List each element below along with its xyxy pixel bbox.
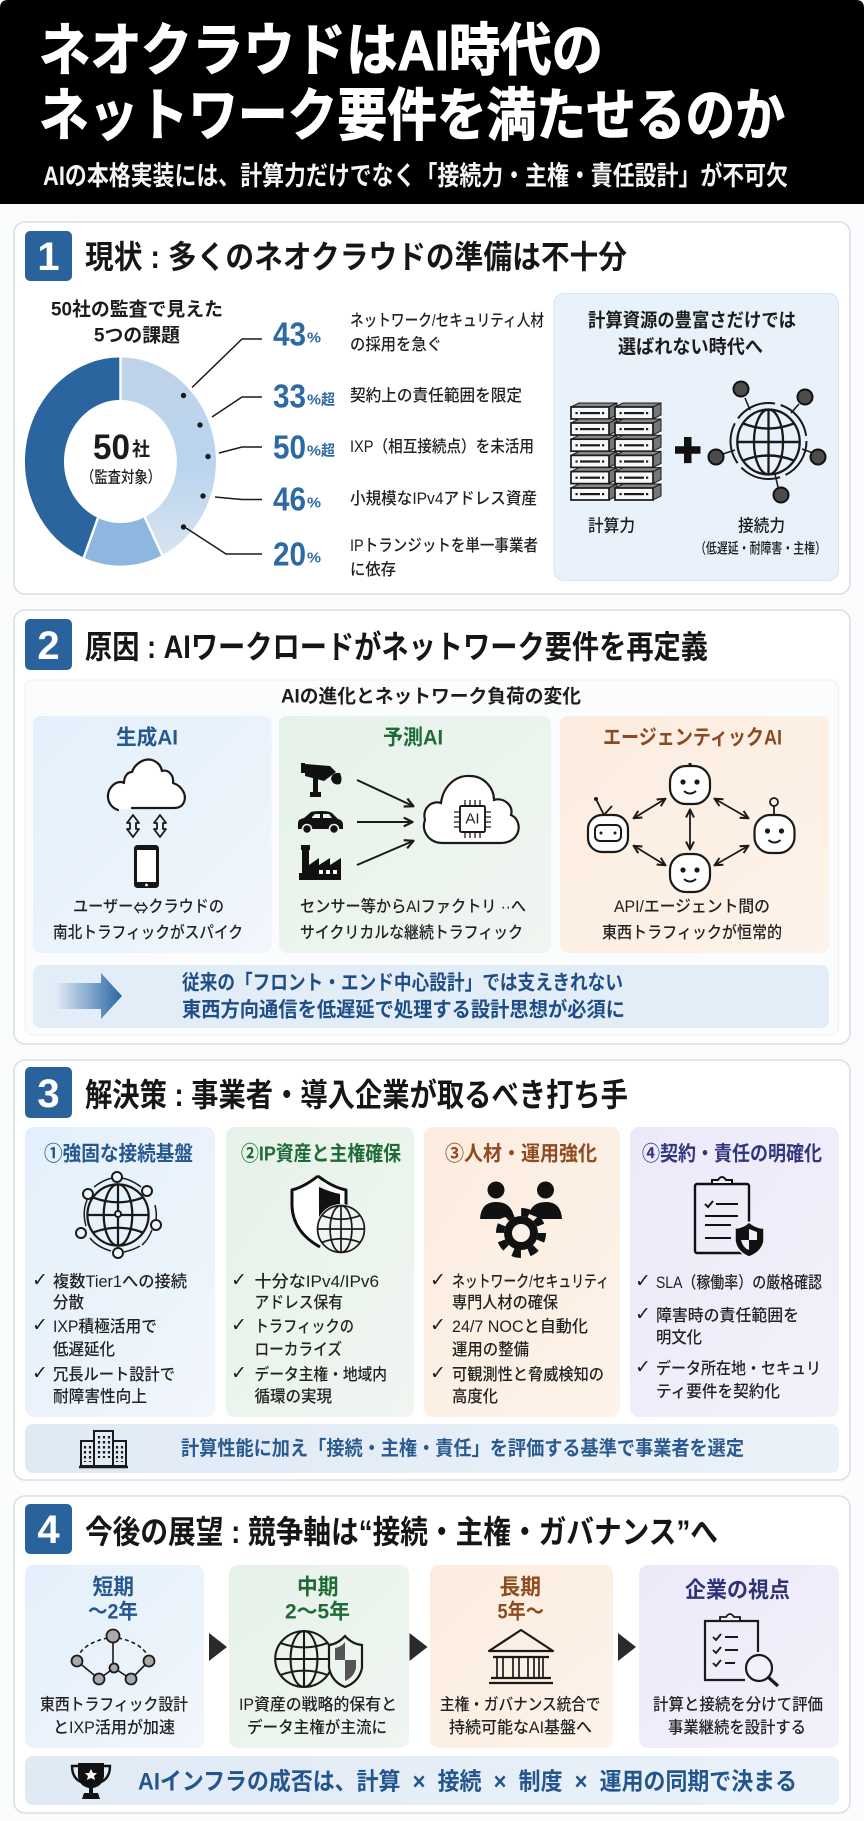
card text bbox=[239, 1695, 397, 1737]
card text: API/エージェント間の bbox=[614, 898, 770, 916]
bullet list: ✓ bbox=[231, 1362, 247, 1384]
section 2 badge bbox=[25, 619, 72, 670]
section 4 badge: 4 bbox=[37, 1508, 60, 1552]
bullet list: ✓ bbox=[32, 1362, 48, 1384]
bullet list: ✓ bbox=[32, 1269, 48, 1291]
icon: server racks bbox=[571, 403, 661, 500]
donut chart bbox=[25, 357, 216, 566]
stat 20%: IPトランジットを単一事業者 bbox=[350, 536, 538, 555]
compute label: 計算力 bbox=[588, 516, 635, 536]
stat 20%: に依存 bbox=[350, 560, 396, 579]
card text: 持続可能なAI基盤へ bbox=[449, 1718, 592, 1737]
banner: design conclusion bbox=[33, 965, 829, 1028]
card: talent and operations bbox=[424, 1127, 620, 1417]
card text bbox=[653, 1695, 823, 1737]
section 3 heading: 解決策 : 事業者・導入企業が取るべき打ち手 bbox=[85, 1077, 628, 1113]
bullet list: アドレス保有 bbox=[254, 1293, 343, 1312]
header band bbox=[0, 0, 864, 204]
card: generative AI bbox=[33, 716, 272, 953]
bullet list: 運用の整備 bbox=[452, 1340, 529, 1359]
donut heading: 50社の監査で見えた bbox=[51, 298, 223, 320]
donut heading: 5つの課題 bbox=[94, 326, 180, 346]
bullet list: IXP積極活用で bbox=[53, 1317, 157, 1336]
icon: left robot bbox=[588, 797, 628, 852]
icon: phone bbox=[134, 845, 159, 888]
section 3 badge: 3 bbox=[37, 1072, 60, 1116]
bullet list: 低遅延化 bbox=[53, 1340, 115, 1359]
card: talent and operations: ③人材・運用強化 bbox=[445, 1142, 597, 1166]
card text: IP資産の戦略的保有と bbox=[239, 1695, 397, 1714]
bullet list: 複数Tier1への接続 bbox=[53, 1272, 187, 1291]
card: long term: 長期 bbox=[500, 1574, 541, 1600]
card: connectivity foundation bbox=[25, 1127, 215, 1417]
icon: AI cloud: AI bbox=[465, 810, 480, 828]
icon: clipboard with shield bbox=[695, 1177, 764, 1257]
icon: trophy bbox=[72, 1763, 110, 1799]
arrows to cloud bbox=[357, 780, 413, 865]
donut center label bbox=[81, 428, 161, 486]
bullet list: ✓ bbox=[430, 1269, 446, 1291]
icon: plus bbox=[675, 437, 700, 463]
bullet list: 冗長ルート設計で bbox=[53, 1365, 175, 1384]
bullet list: 循環の実現 bbox=[254, 1387, 332, 1406]
icon: shield with globe bbox=[292, 1176, 366, 1254]
inner heading: AIの進化とネットワーク負荷の変化 bbox=[281, 684, 581, 708]
icon: camera bbox=[301, 763, 342, 797]
icon: globe with nodes bbox=[76, 1172, 161, 1258]
bullet list bbox=[32, 1269, 187, 1406]
bullet list bbox=[430, 1269, 609, 1406]
bullet list: ✓ bbox=[231, 1314, 247, 1336]
icon: bottom robot bbox=[670, 853, 710, 892]
bullet list: 可観測性と脅威検知の bbox=[452, 1365, 604, 1384]
icon: car bbox=[298, 811, 343, 834]
section 1 badge: 1 bbox=[37, 235, 60, 279]
bullet list: ✓ bbox=[635, 1270, 651, 1292]
bullet list: データ所在地・セキュリ bbox=[656, 1358, 821, 1378]
card: IP assets and sovereignty: ②IP資産と主権確保 bbox=[241, 1142, 401, 1166]
card text: サイクリカルな継続トラフィック bbox=[300, 923, 523, 942]
card: mid term: 中期 bbox=[297, 1574, 338, 1600]
stat 46%: % bbox=[307, 494, 321, 512]
icon: network nodes bbox=[72, 1630, 154, 1684]
card: contracts and responsibility: ④契約・責任の明確化 bbox=[642, 1142, 822, 1166]
connectivity label bbox=[695, 516, 826, 558]
card: contracts and responsibility bbox=[630, 1127, 839, 1417]
bullet list: ✓ bbox=[430, 1362, 446, 1384]
bullet list: 専門人材の確保 bbox=[452, 1293, 558, 1312]
stat 20%: % bbox=[307, 550, 321, 566]
banner text: 計算性能に加え「接続・主権・責任」を評価する基準で事業者を選定 bbox=[181, 1437, 744, 1460]
bullet list: 明文化 bbox=[656, 1328, 702, 1347]
stat 43%: 43 bbox=[273, 316, 306, 352]
icon: factory bbox=[299, 845, 341, 880]
card: enterprise view: 企業の視点 bbox=[685, 1578, 790, 1602]
icon: people and gear bbox=[480, 1182, 562, 1254]
title line 1: ネオクラウドはAI時代の bbox=[39, 19, 603, 83]
banner text: 東西方向通信を低遅延で処理する設計思想が必須に bbox=[182, 998, 625, 1022]
callout heading bbox=[588, 308, 796, 358]
bullet list: ネットワーク/セキュリティ bbox=[452, 1272, 609, 1291]
card: agentic AI bbox=[560, 716, 829, 953]
card: short term: ～2年 bbox=[88, 1600, 138, 1624]
icon: gradient arrow bbox=[55, 973, 122, 1019]
banner text: AIインフラの成否は、計算 × 接続 × 制度 × 運用の同期で決まる bbox=[138, 1768, 797, 1796]
connectivity label: 接続力 bbox=[738, 516, 785, 536]
card text: センサー等からAIファクトリ ··へ bbox=[300, 897, 526, 916]
card: generative AI: 生成AI bbox=[116, 726, 178, 750]
panel: section 3 solutions bbox=[14, 1060, 850, 1480]
callout heading: 選ばれない時代へ bbox=[618, 336, 763, 358]
card: predictive AI bbox=[279, 716, 551, 953]
card text bbox=[53, 895, 243, 942]
card text: ユーザー⇔クラウドの bbox=[73, 895, 224, 919]
bullet list bbox=[635, 1270, 822, 1401]
card text: 主権・ガバナンス統合で bbox=[440, 1695, 600, 1714]
icon: right robot bbox=[754, 798, 794, 853]
section 4 heading: 今後の展望 : 競争軸は“接続・主権・ガバナンス”へ bbox=[85, 1514, 718, 1550]
card: enterprise view bbox=[639, 1565, 839, 1748]
card: connectivity foundation: ①強固な接続基盤 bbox=[44, 1142, 193, 1166]
card: IP assets and sovereignty bbox=[226, 1127, 414, 1417]
donut center label: 50 bbox=[93, 428, 130, 467]
icon: top robot bbox=[670, 763, 710, 804]
section 1 badge bbox=[25, 231, 72, 281]
section 2 badge: 2 bbox=[37, 624, 60, 668]
stat 46%: 46 bbox=[273, 480, 306, 518]
card text: 東西トラフィックが恒常的 bbox=[602, 922, 782, 942]
section 2 heading: 原因 : AIワークロードがネットワーク要件を再定義 bbox=[85, 629, 708, 665]
arrow: mid to long bbox=[410, 1633, 428, 1661]
card text bbox=[440, 1695, 600, 1737]
stat 33%: 超 bbox=[321, 390, 335, 408]
stat 20% bbox=[273, 536, 538, 579]
panel: section 2 cause bbox=[14, 610, 850, 1044]
stat 33% bbox=[273, 378, 522, 414]
card text: データ主権が主流に bbox=[247, 1717, 387, 1737]
leader lines bbox=[181, 339, 262, 554]
double arrows bbox=[634, 799, 748, 865]
stat 50%: 超 bbox=[321, 442, 335, 460]
card: long term: 5年～ bbox=[498, 1600, 544, 1624]
bullet list: 十分なIPv4/IPv6 bbox=[254, 1272, 379, 1291]
bullet list: ティ要件を契約化 bbox=[656, 1382, 780, 1401]
card text: 南北トラフィックがスパイク bbox=[53, 922, 243, 942]
icon: AI cloud bbox=[424, 776, 519, 843]
stat 20%: 20 bbox=[273, 536, 306, 572]
card text bbox=[40, 1695, 188, 1737]
card text bbox=[602, 898, 782, 942]
banner text: 従来の「フロント・エンド中心設計」では支えきれない bbox=[182, 972, 623, 994]
section 4 badge bbox=[25, 1504, 72, 1554]
card: short term: 短期 bbox=[92, 1574, 134, 1600]
inner panel: AI evolution bbox=[25, 680, 838, 1035]
bullet list: SLA（稼働率）の厳格確認 bbox=[656, 1273, 822, 1292]
stat 33%: 契約上の責任範囲を限定 bbox=[350, 386, 522, 405]
bullet list: 高度化 bbox=[452, 1387, 498, 1406]
bullet list: トラフィックの bbox=[254, 1317, 354, 1336]
panel: compute and connectivity bbox=[554, 294, 838, 580]
bullet list: ローカライズ bbox=[254, 1339, 342, 1359]
donut center label: 社 bbox=[132, 438, 150, 460]
card: mid term bbox=[229, 1565, 409, 1748]
bullet list: 分散 bbox=[53, 1293, 84, 1312]
stat 43% bbox=[273, 311, 544, 354]
section 3 badge bbox=[25, 1067, 72, 1118]
icon: globe network bbox=[708, 382, 826, 502]
card text: 計算と接続を分けて評価 bbox=[653, 1695, 823, 1714]
section 1 heading: 現状 : 多くのネオクラウドの準備は不十分 bbox=[85, 239, 627, 275]
bullet list: 耐障害性向上 bbox=[53, 1387, 147, 1406]
card: agentic AI: エージェンティックAI bbox=[603, 726, 782, 750]
icon: globe and shield bbox=[275, 1631, 362, 1687]
card text: 事業継続を設計する bbox=[668, 1718, 806, 1737]
stat 46% bbox=[273, 480, 537, 518]
bullet list: ✓ bbox=[635, 1303, 651, 1325]
icon: clipboard and magnifier bbox=[705, 1614, 778, 1686]
bullet list: ✓ bbox=[231, 1269, 247, 1291]
card: predictive AI: 予測AI bbox=[383, 726, 443, 750]
banner: conclusion bbox=[25, 1756, 839, 1805]
bullet list bbox=[231, 1269, 387, 1406]
bullet list: ✓ bbox=[430, 1314, 446, 1336]
card text: とIXP活用が加速 bbox=[53, 1717, 175, 1737]
stat 50% bbox=[273, 428, 534, 466]
icon: temple bbox=[489, 1630, 553, 1683]
card: mid term: 2～5年 bbox=[285, 1600, 350, 1624]
stat 50%: IXP（相互接続点）を未活用 bbox=[350, 437, 534, 456]
panel: section 4 outlook bbox=[14, 1496, 850, 1813]
card text: 東西トラフィック設計 bbox=[40, 1695, 188, 1714]
banner: selection criteria bbox=[25, 1424, 839, 1473]
arrow: long to enterprise bbox=[618, 1633, 636, 1661]
stat 50%: % bbox=[307, 442, 321, 460]
stat 50%: 50 bbox=[273, 428, 306, 466]
bullet list: ✓ bbox=[635, 1356, 651, 1378]
banner text bbox=[182, 972, 625, 1022]
icon: building bbox=[79, 1431, 128, 1467]
bullet list: 24/7 NOCと自動化 bbox=[452, 1317, 588, 1336]
donut center label: （監査対象） bbox=[81, 468, 161, 486]
card text bbox=[300, 897, 526, 942]
icon: cloud bbox=[108, 760, 185, 810]
stat 43%: ネットワーク/セキュリティ人材 bbox=[350, 311, 544, 330]
stat 33%: 33 bbox=[273, 378, 306, 414]
card: short term bbox=[25, 1565, 204, 1748]
card: long term bbox=[430, 1565, 613, 1748]
bullet list: 障害時の責任範囲を bbox=[656, 1306, 799, 1325]
bullet list: ✓ bbox=[32, 1314, 48, 1336]
donut heading bbox=[51, 298, 223, 346]
stat 43%: の採用を急ぐ bbox=[350, 335, 442, 354]
callout heading: 計算資源の豊富さだけでは bbox=[588, 308, 796, 332]
icon: up and down arrows bbox=[127, 815, 166, 837]
bullet list: データ主権・地域内 bbox=[254, 1364, 387, 1384]
stat 33%: % bbox=[307, 392, 321, 408]
panel: section 1 current state bbox=[14, 222, 850, 594]
arrow: short to mid bbox=[209, 1633, 227, 1661]
stat 46%: 小規模なIPv4アドレス資産 bbox=[350, 489, 537, 508]
stat 43%: % bbox=[307, 330, 321, 346]
connectivity label: （低遅延・耐障害・主権） bbox=[695, 540, 826, 558]
